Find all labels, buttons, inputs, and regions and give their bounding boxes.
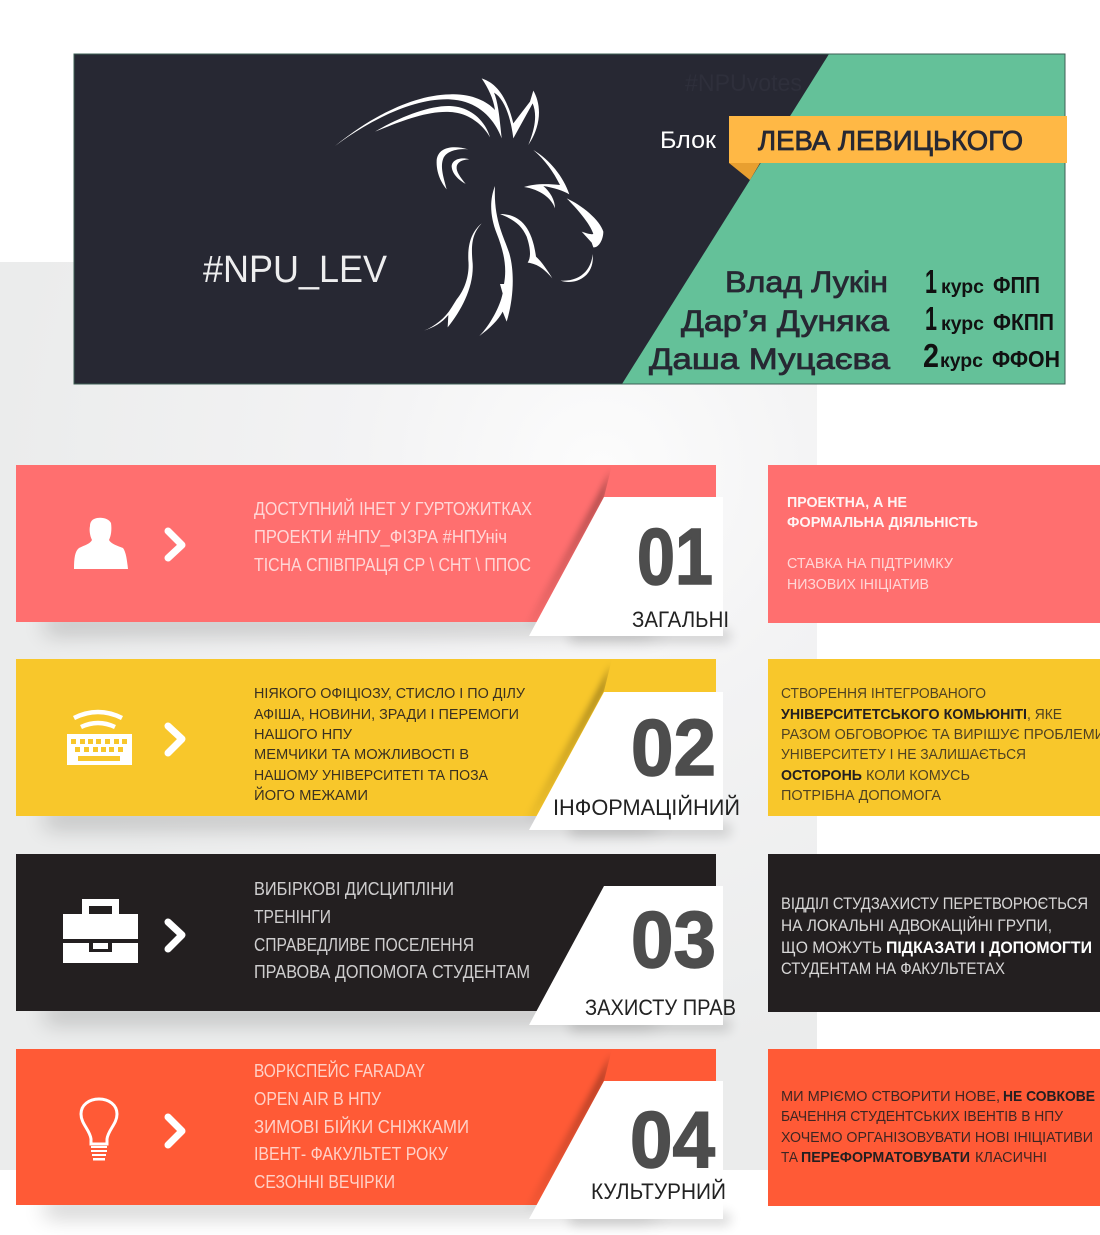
note text: СТВОРЕННЯ ІНТЕГРОВАНОГО xyxy=(781,685,986,702)
note heading xyxy=(787,494,978,531)
header banner xyxy=(74,54,1067,384)
list text xyxy=(254,1060,469,1192)
list text: ПРОЕКТИ #НПУ_ФІЗРА #НПУніч xyxy=(254,527,507,548)
faint hashtag: #NPUvotes xyxy=(685,70,802,97)
icon: light bulb xyxy=(81,1099,117,1160)
candidate courses xyxy=(923,263,1060,374)
note text: НЕ СОВКОВЕ xyxy=(1003,1088,1095,1105)
note text: УНІВЕРСИТЕТУ І НЕ ЗАЛИШАЄТЬСЯ xyxy=(781,746,1026,763)
note text: ЩО МОЖУТЬ xyxy=(781,939,882,957)
list text: ВИБІРКОВІ ДИСЦИПЛІНИ xyxy=(254,879,454,899)
note heading: ПРОЕКТНА, А НЕ xyxy=(787,494,907,511)
list text xyxy=(254,498,532,575)
icon: lion head logo xyxy=(335,78,603,336)
note text xyxy=(781,1088,1095,1166)
panel: row 2 information xyxy=(16,659,740,836)
list text: ІВЕНТ- ФАКУЛЬТЕТ РОКУ xyxy=(254,1144,449,1164)
note text: ТА xyxy=(781,1149,798,1166)
candidate names: Дар’я Дуняка xyxy=(681,305,889,338)
candidate courses: 2 xyxy=(923,337,939,374)
candidate courses: курс xyxy=(941,314,984,335)
list text: АФІША, НОВИНИ, ЗРАДИ І ПЕРЕМОГИ xyxy=(254,706,519,723)
candidate names: Влад Лукін xyxy=(725,266,888,299)
category label: КУЛЬТУРНИЙ xyxy=(591,1179,726,1204)
category label: ЗАХИСТУ ПРАВ xyxy=(585,995,736,1020)
icon: keyboard xyxy=(67,712,132,765)
panel: right note 3 xyxy=(768,854,1100,1012)
number: 01 xyxy=(637,512,713,601)
note text: КОЛИ КОМУСЬ xyxy=(866,767,970,784)
note text: , ЯКЕ xyxy=(1027,706,1062,723)
note body: СТАВКА НА ПІДТРИМКУ xyxy=(787,555,953,572)
list text: ПРАВОВА ДОПОМОГА СТУДЕНТАМ xyxy=(254,962,530,982)
list text: OPEN AIR В НПУ xyxy=(254,1089,381,1109)
note body: НИЗОВИХ ІНІЦІАТИВ xyxy=(787,576,929,593)
category label: ІНФОРМАЦІЙНИЙ xyxy=(553,795,740,820)
note text xyxy=(781,895,1092,978)
note text: ПІДКАЗАТИ І ДОПОМОГТИ xyxy=(886,939,1092,957)
list text xyxy=(254,879,530,982)
number: 04 xyxy=(630,1095,715,1184)
list text xyxy=(254,685,525,804)
note body xyxy=(787,555,953,593)
list text: СЕЗОННІ ВЕЧІРКИ xyxy=(254,1172,395,1192)
candidate courses: ФПП xyxy=(993,272,1040,298)
icon: chevron xyxy=(168,726,182,753)
icon: person xyxy=(74,518,128,569)
panel: row 1 general xyxy=(16,465,730,642)
candidate courses: ФКПП xyxy=(993,309,1054,335)
block label: Блок xyxy=(660,127,717,154)
number: 02 xyxy=(631,703,716,792)
note text: БАЧЕННЯ СТУДЕНТСЬКИХ ІВЕНТІВ В НПУ xyxy=(781,1108,1063,1125)
list text: НІЯКОГО ОФІЦІОЗУ, СТИСЛО І ПО ДІЛУ xyxy=(254,685,525,702)
list text: ЙОГО МЕЖАМИ xyxy=(254,786,368,804)
ribbon xyxy=(729,116,1067,163)
banner edge xyxy=(74,54,1065,384)
note text: ПЕРЕФОРМАТОВУВАТИ xyxy=(801,1149,970,1166)
background panel xyxy=(0,262,817,1170)
icon: chevron xyxy=(168,531,182,558)
note text: ПОТРІБНА ДОПОМОГА xyxy=(781,787,941,804)
candidate names xyxy=(649,266,890,376)
icon: chevron xyxy=(168,1117,182,1145)
panel: right note 2 xyxy=(768,659,1100,816)
panel: row 3 rights protection xyxy=(16,854,736,1031)
hashtag title: #NPU_LEV xyxy=(203,249,388,291)
list text: НАШОГО НПУ xyxy=(254,726,352,743)
candidate names: Даша Муцаєва xyxy=(649,343,890,376)
list text: НАШОМУ УНІВЕРСИТЕТІ ТА ПОЗА xyxy=(254,767,488,784)
list text: ТІСНА СПІВПРАЦЯ СР \ СНТ \ ППОС xyxy=(254,555,531,575)
ribbon fold xyxy=(729,163,760,180)
list text: СПРАВЕДЛИВЕ ПОСЕЛЕННЯ xyxy=(254,935,474,955)
icon: chevron xyxy=(168,922,182,949)
candidate courses: курс xyxy=(940,351,983,372)
candidate courses: 1 xyxy=(925,263,937,300)
note text xyxy=(781,685,1100,804)
candidate courses: ФФОН xyxy=(992,346,1060,372)
note text: ОСТОРОНЬ xyxy=(781,767,862,784)
panel: right note 4 xyxy=(768,1049,1100,1206)
list text: ЗИМОВІ БІЙКИ СНІЖКАМИ xyxy=(254,1116,469,1137)
note text: КЛАСИЧНІ xyxy=(975,1149,1047,1166)
note text: УНІВЕРСИТЕТСЬКОГО КОМЬЮНІТІ xyxy=(781,706,1027,723)
candidate courses: курс xyxy=(941,277,984,298)
list text: ДОСТУПНИЙ ІНЕТ У ГУРТОЖИТКАХ xyxy=(254,498,532,519)
panel: row 4 cultural xyxy=(16,1049,730,1225)
list text: МЕМЧИКИ ТА МОЖЛИВОСТІ В xyxy=(254,746,469,763)
banner dark base xyxy=(74,54,1065,384)
list text: ТРЕНІНГИ xyxy=(254,907,331,927)
category label: ЗАГАЛЬНІ xyxy=(632,607,729,632)
banner green wedge xyxy=(622,54,1065,384)
ribbon title: ЛЕВА ЛЕВИЦЬКОГО xyxy=(758,125,1023,156)
number: 03 xyxy=(631,895,716,984)
note text: НА ЛОКАЛЬНІ АДВОКАЦІЙНІ ГРУПИ, xyxy=(781,916,1052,935)
note heading: ФОРМАЛЬНА ДІЯЛЬНІСТЬ xyxy=(787,514,978,531)
panel: right note 1 xyxy=(768,465,1100,623)
icon: briefcase xyxy=(63,899,138,963)
candidate courses: 1 xyxy=(925,300,937,337)
note text: СТУДЕНТАМ НА ФАКУЛЬТЕТАХ xyxy=(781,960,1005,978)
list text: ВОРКСПЕЙС FARADAY xyxy=(254,1060,425,1081)
note text: МИ МРІЄМО СТВОРИТИ НОВЕ, xyxy=(781,1088,1000,1105)
